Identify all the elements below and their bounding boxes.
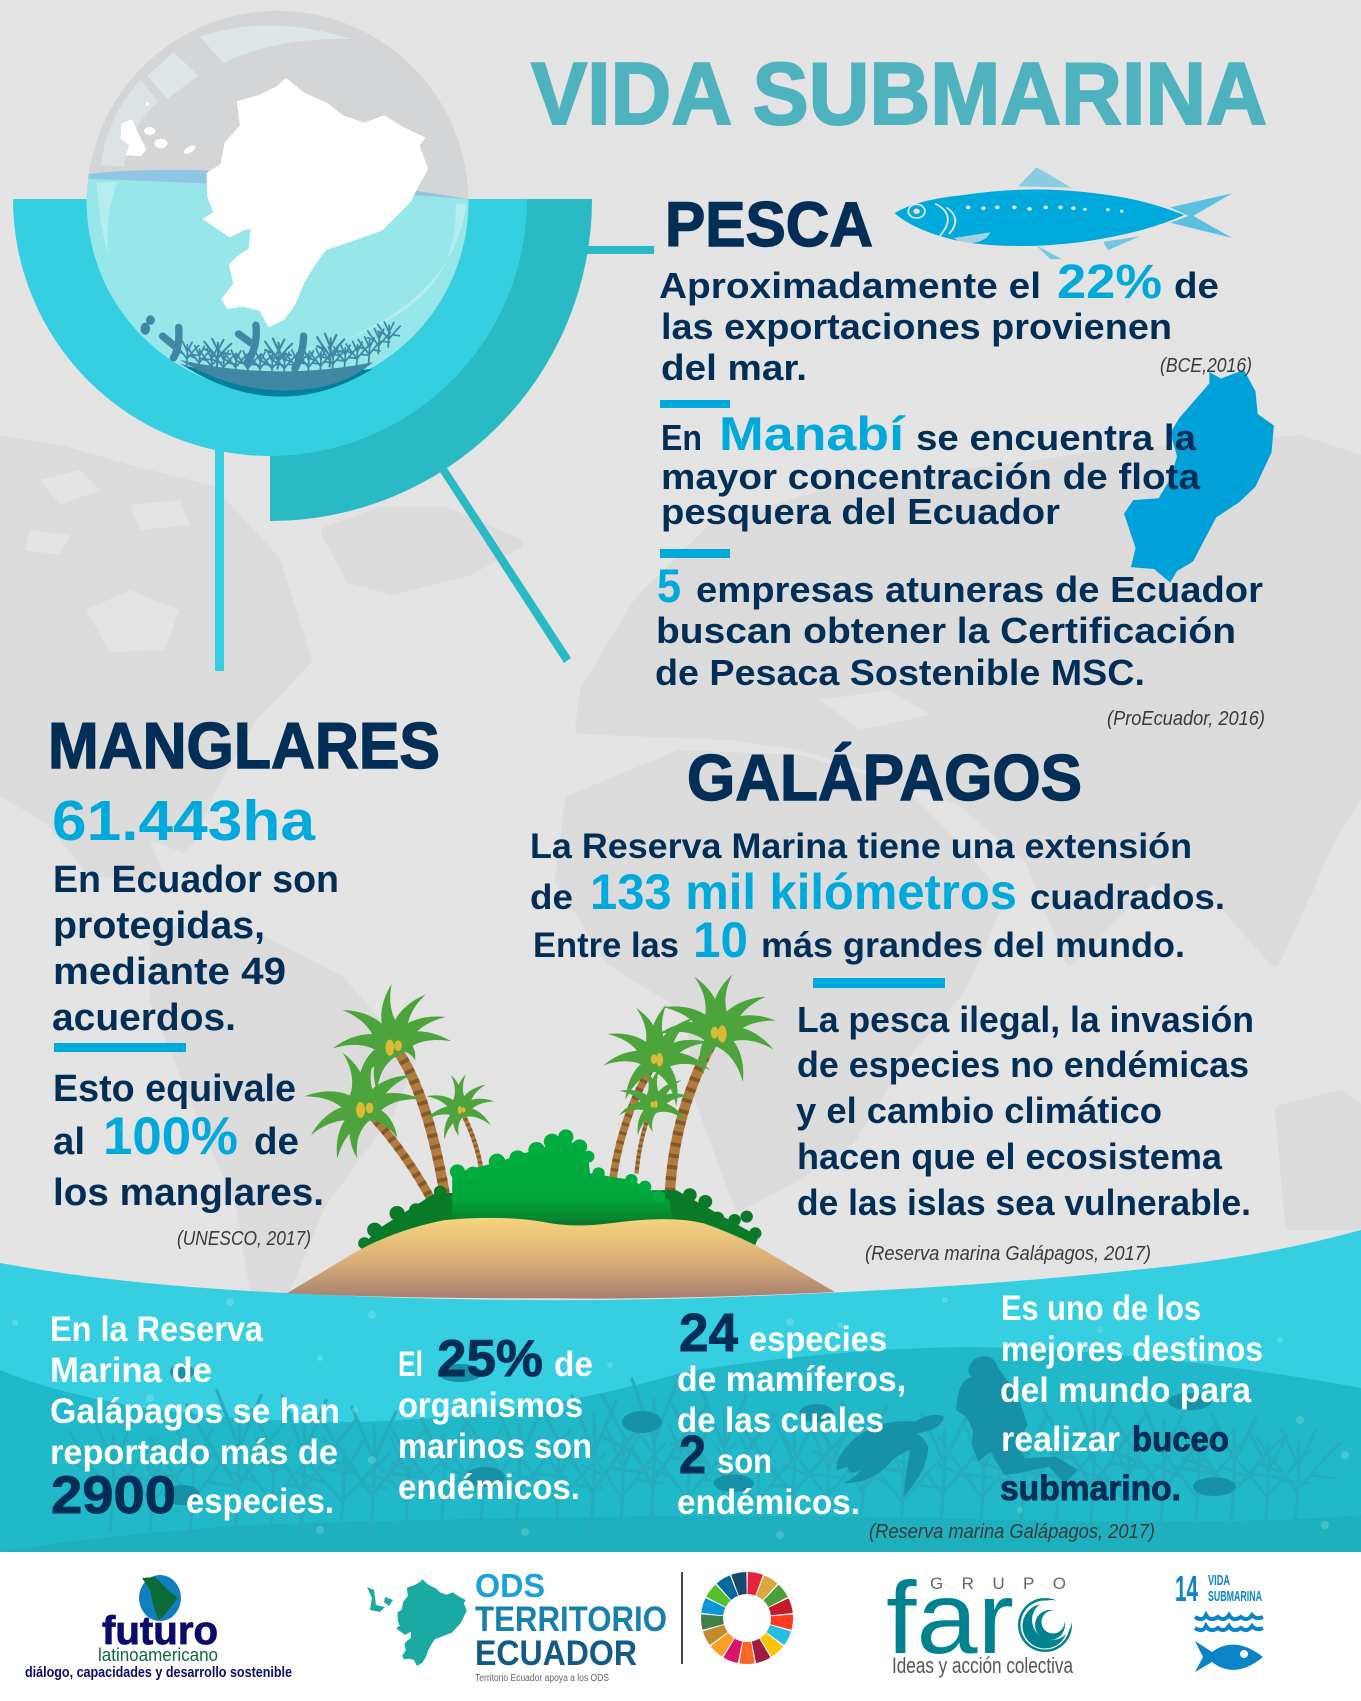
logo: ODS territorio Ecuador: ECUADOR bbox=[475, 1634, 637, 1673]
bubbles bbox=[12, 1297, 1349, 1539]
island illustration bbox=[287, 972, 835, 1299]
reef in globe bbox=[141, 315, 400, 397]
logo: goal 14: VIDA bbox=[1208, 1572, 1230, 1589]
sand dune bbox=[287, 1218, 835, 1299]
logo: futuro latinoamericano: latinoamericano bbox=[98, 1645, 218, 1665]
text: marine reserve extension: de bbox=[530, 878, 573, 917]
icon: turtle bbox=[836, 1415, 944, 1497]
text: empresas atuneras bbox=[655, 559, 1263, 693]
text block: 25% endemic: 25% bbox=[437, 1330, 543, 1388]
text: threats: de especies no endémicas bbox=[797, 1044, 1249, 1085]
palm crown bbox=[331, 983, 452, 1097]
logo: goal 14: 14 bbox=[1175, 1568, 1198, 1609]
semicircle rings bbox=[13, 199, 592, 521]
citation: Reserva marina bottom: (Reserva marina Galápagos, 2017) bbox=[869, 1521, 1155, 1543]
palm crown bbox=[424, 1073, 496, 1143]
text: exportaciones: 22% bbox=[1057, 256, 1162, 309]
text: Manabí bbox=[661, 407, 1201, 532]
logo: grupo faro bbox=[886, 1561, 1074, 1678]
text block: 25% endemic: de bbox=[554, 1345, 593, 1384]
logo: futuro latinoamericano: futuro bbox=[102, 1609, 218, 1653]
icon: fish bbox=[894, 167, 1232, 259]
text block: diving: del mundo para bbox=[1000, 1371, 1252, 1410]
text block: 24 mammals: de las cuales bbox=[677, 1401, 884, 1440]
panel: manglares bbox=[48, 709, 440, 1250]
text: threats: hacen que el ecosistema bbox=[797, 1136, 1223, 1177]
text block: 24 mammals: endémicos. bbox=[677, 1483, 860, 1522]
logo: SDG wheel bbox=[698, 1569, 796, 1667]
logo: goal 14 bbox=[1175, 1568, 1263, 1672]
logo: goal 14: SUBMARINA bbox=[1208, 1588, 1262, 1605]
text: threats: de las islas sea vulnerable. bbox=[797, 1182, 1251, 1223]
text: empresas atuneras: de Pesaca Sostenible MSC. bbox=[655, 652, 1145, 693]
palm: trunks bbox=[370, 1037, 716, 1220]
text: equivalent percentage: al bbox=[53, 1121, 85, 1163]
text: threats bbox=[796, 999, 1254, 1223]
text: empresas atuneras: 5 bbox=[657, 559, 681, 612]
heading: pesca: PESCA bbox=[665, 190, 873, 260]
text: exportaciones: del mar. bbox=[661, 347, 807, 388]
text block: diving: mejores destinos bbox=[1001, 1330, 1263, 1369]
citation: UNESCO: (UNESCO, 2017) bbox=[177, 1228, 311, 1250]
heading: galápagos: GALÁPAGOS bbox=[687, 741, 1082, 814]
stat: hectares: 61.443ha bbox=[52, 789, 316, 853]
text block: 25% endemic: El bbox=[398, 1345, 423, 1384]
text block: 2900 species: reportado más de bbox=[50, 1433, 338, 1472]
text: equivalent percentage: los manglares. bbox=[53, 1172, 324, 1214]
text block: 24 mammals bbox=[677, 1303, 906, 1522]
text: marine reserve extension: cuadrados. bbox=[1030, 878, 1225, 917]
text: equivalent percentage bbox=[53, 1068, 324, 1214]
text block: diving: buceo bbox=[1132, 1420, 1229, 1459]
text: protected mangroves: En Ecuador son bbox=[53, 859, 339, 901]
text: exportaciones: Aproximadamente el bbox=[659, 265, 1041, 306]
text: Manabí: se encuentra la bbox=[916, 417, 1197, 458]
text block: 25% endemic bbox=[398, 1330, 593, 1507]
background map light sea details bbox=[25, 470, 930, 880]
text: equivalent percentage: de bbox=[254, 1121, 299, 1163]
text: protected mangroves: acuerdos. bbox=[52, 997, 236, 1039]
citation: BCE: (BCE,2016) bbox=[1160, 355, 1252, 377]
title: VIDA SUBMARINA bbox=[531, 44, 1267, 143]
logo: futuro latinoamericano bbox=[25, 1575, 292, 1681]
palm crown bbox=[657, 972, 777, 1088]
text block: 24 mammals: 2 bbox=[679, 1425, 706, 1485]
text: marine reserve extension: La Reserva Marina tiene una extensión bbox=[530, 827, 1192, 866]
palm crown bbox=[303, 1048, 422, 1164]
logo: ODS territorio Ecuador: Territorio Ecuador apoya a los ODS bbox=[475, 1673, 609, 1684]
logo: grupo faro: GRUPO bbox=[930, 1574, 1066, 1593]
text block: 25% endemic: endémicos. bbox=[398, 1468, 580, 1507]
text block: 2900 species bbox=[50, 1310, 340, 1525]
text block: diving: realizar bbox=[1001, 1420, 1120, 1459]
text block: 2900 species: especies. bbox=[186, 1482, 334, 1521]
bushes bbox=[358, 1129, 761, 1249]
logo: ODS territorio Ecuador: ODS bbox=[475, 1567, 545, 1604]
palm crown bbox=[616, 1067, 691, 1139]
text block: diving: Es uno de los bbox=[1001, 1289, 1201, 1328]
text block: 24 mammals: 24 bbox=[679, 1303, 738, 1363]
map: Ecuador bbox=[204, 79, 427, 326]
text: Manabí: mayor concentración de flota bbox=[661, 456, 1201, 497]
text: protected mangroves bbox=[52, 859, 339, 1039]
text: protected mangroves: mediante 49 bbox=[53, 951, 286, 993]
text: marine reserve extension: más grandes del mundo. bbox=[761, 926, 1185, 965]
connector lines bbox=[215, 246, 654, 671]
text block: diving bbox=[1000, 1289, 1263, 1508]
citation: Reserva marina: (Reserva marina Galápagos, 2017) bbox=[865, 1243, 1151, 1265]
text block: 24 mammals: son bbox=[717, 1442, 772, 1481]
icon: diver bbox=[956, 1356, 1078, 1483]
logo: ODS territorio Ecuador: TERRITORIO bbox=[475, 1600, 667, 1639]
text block: 2900 species: Galápagos se han bbox=[50, 1392, 340, 1431]
islands: Galápagos bbox=[121, 102, 197, 156]
text: exportaciones: de bbox=[1174, 265, 1219, 306]
text block: 25% endemic: marinos son bbox=[398, 1427, 592, 1466]
icon: small fish bbox=[164, 1364, 662, 1505]
text: threats: y el cambio climático bbox=[796, 1090, 1162, 1131]
logo: ODS territorio Ecuador bbox=[367, 1567, 667, 1684]
text: equivalent percentage: Esto equivale bbox=[53, 1068, 296, 1110]
text block: 24 mammals: especies bbox=[749, 1320, 887, 1359]
text: Manabí: En bbox=[661, 417, 702, 458]
background world map bbox=[0, 440, 1361, 1290]
text: exportaciones: las exportaciones provienen bbox=[661, 306, 1172, 347]
text: threats: La pesca ilegal, la invasión bbox=[797, 999, 1254, 1040]
text block: 25% endemic: organismos bbox=[398, 1386, 583, 1425]
text block: 2900 species: 2900 bbox=[51, 1466, 176, 1525]
text: Manabí: pesquera del Ecuador bbox=[661, 491, 1060, 532]
heading: manglares: MANGLARES bbox=[48, 709, 440, 782]
icon: Manabí province map bbox=[1124, 370, 1274, 582]
text: marine reserve extension: 133 mil kilómetros bbox=[590, 864, 1017, 920]
text block: 2900 species: En la Reserva bbox=[50, 1310, 263, 1349]
sea band bbox=[0, 1230, 1361, 1552]
citation: ProEcuador: (ProEcuador, 2016) bbox=[1107, 708, 1265, 730]
text: Manabí: Manabí bbox=[719, 407, 906, 460]
reef silhouettes bbox=[69, 1379, 1340, 1535]
logo: grupo faro: far bbox=[886, 1561, 1014, 1675]
text block: 24 mammals: de mamíferos, bbox=[677, 1360, 906, 1399]
text: marine reserve extension: 10 bbox=[693, 912, 748, 968]
icon: sea creatures bbox=[714, 1356, 1236, 1497]
globe with Ecuador bbox=[85, 11, 471, 399]
text: empresas atuneras: buscan obtener la Certificación bbox=[656, 610, 1236, 651]
panel: pesca bbox=[655, 167, 1274, 730]
footer bbox=[0, 1552, 1361, 1701]
text block: diving: submarino. bbox=[1000, 1469, 1181, 1508]
text: marine reserve extension bbox=[530, 827, 1225, 968]
text: marine reserve extension: Entre las bbox=[533, 926, 679, 965]
text: equivalent percentage: 100% bbox=[103, 1107, 238, 1166]
panel: galápagos bbox=[530, 741, 1254, 1265]
text block: 2900 species: Marina de bbox=[50, 1351, 212, 1390]
palm crown bbox=[601, 1003, 713, 1110]
text: protected mangroves: protegidas, bbox=[53, 905, 265, 947]
text: empresas atuneras: empresas atuneras de Ecuador bbox=[696, 569, 1263, 610]
logo: futuro latinoamericano: diálogo, capacidades y desarrollo sostenible bbox=[25, 1664, 292, 1681]
text: exportaciones bbox=[659, 256, 1219, 388]
logo: grupo faro: Ideas y acción colectiva bbox=[892, 1653, 1074, 1678]
